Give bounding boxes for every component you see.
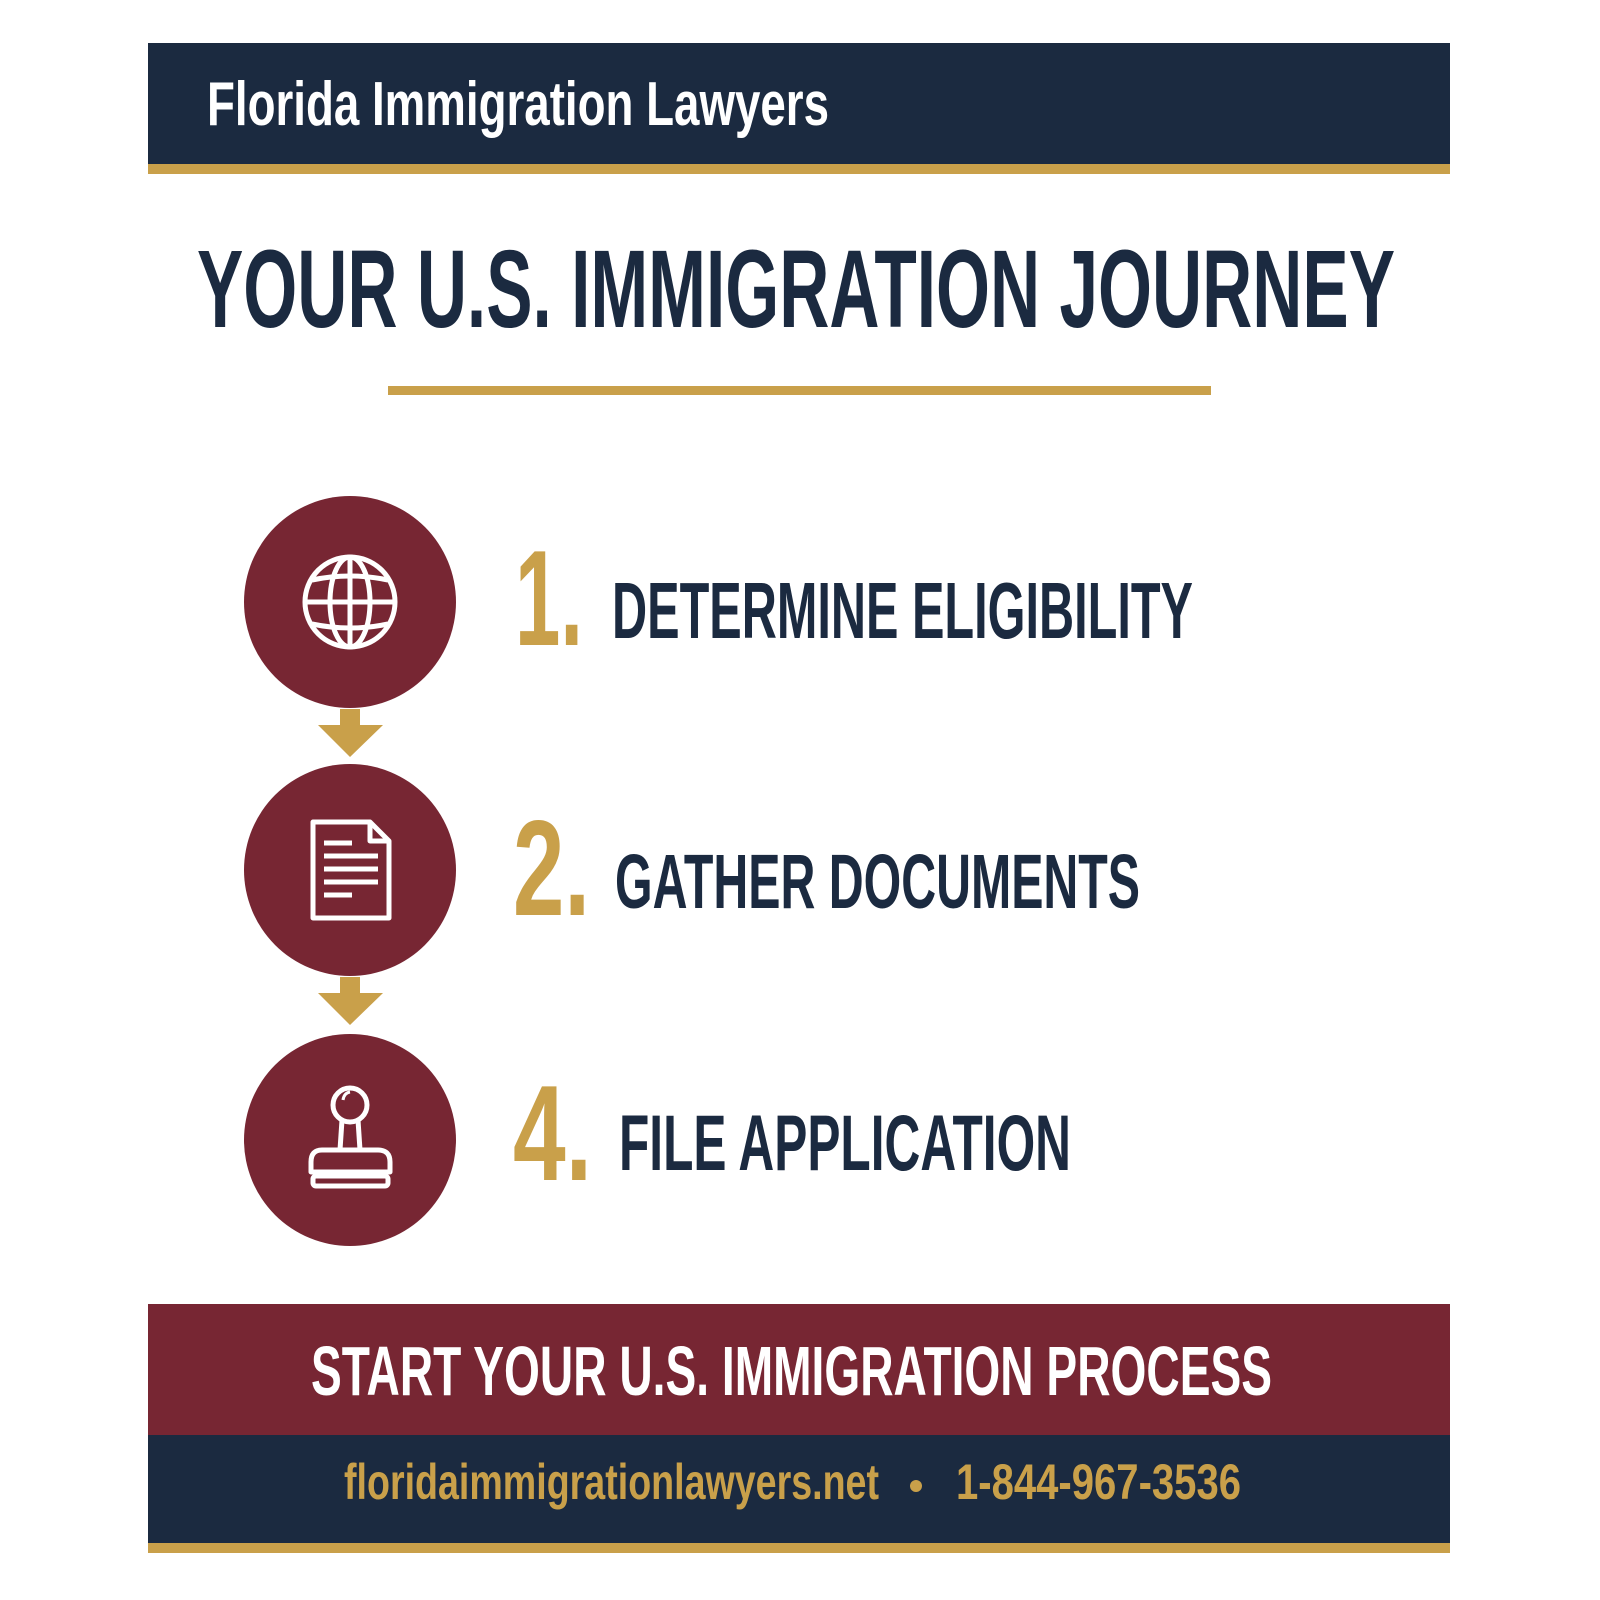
step 3 number: 4. [513, 1057, 592, 1209]
footer contact: 1-844-967-3536 [956, 1454, 1241, 1510]
footer contact [148, 1435, 1450, 1553]
arrow 1 [318, 709, 383, 757]
arrow 2 [318, 977, 383, 1025]
footer call to action [148, 1304, 1450, 1435]
icon: globe [244, 496, 456, 708]
step 3 [244, 1034, 1071, 1246]
step 1 label: DETERMINE ELIGIBILITY [612, 566, 1193, 655]
header bar [148, 43, 1450, 174]
step 2 label: GATHER DOCUMENTS [615, 839, 1140, 925]
step 2 number: 2. [513, 792, 590, 944]
header text: Florida Immigration Lawyers [207, 70, 829, 139]
step 1 [244, 496, 1193, 708]
step 3 label: FILE APPLICATION [619, 1098, 1071, 1187]
icon: document [244, 764, 456, 976]
step 1 number: 1. [515, 522, 583, 674]
footer contact: floridaimmigrationlawyers.net [344, 1454, 879, 1510]
step 2 [244, 764, 1140, 976]
title underline [388, 386, 1211, 395]
icon: stamp [244, 1034, 456, 1246]
